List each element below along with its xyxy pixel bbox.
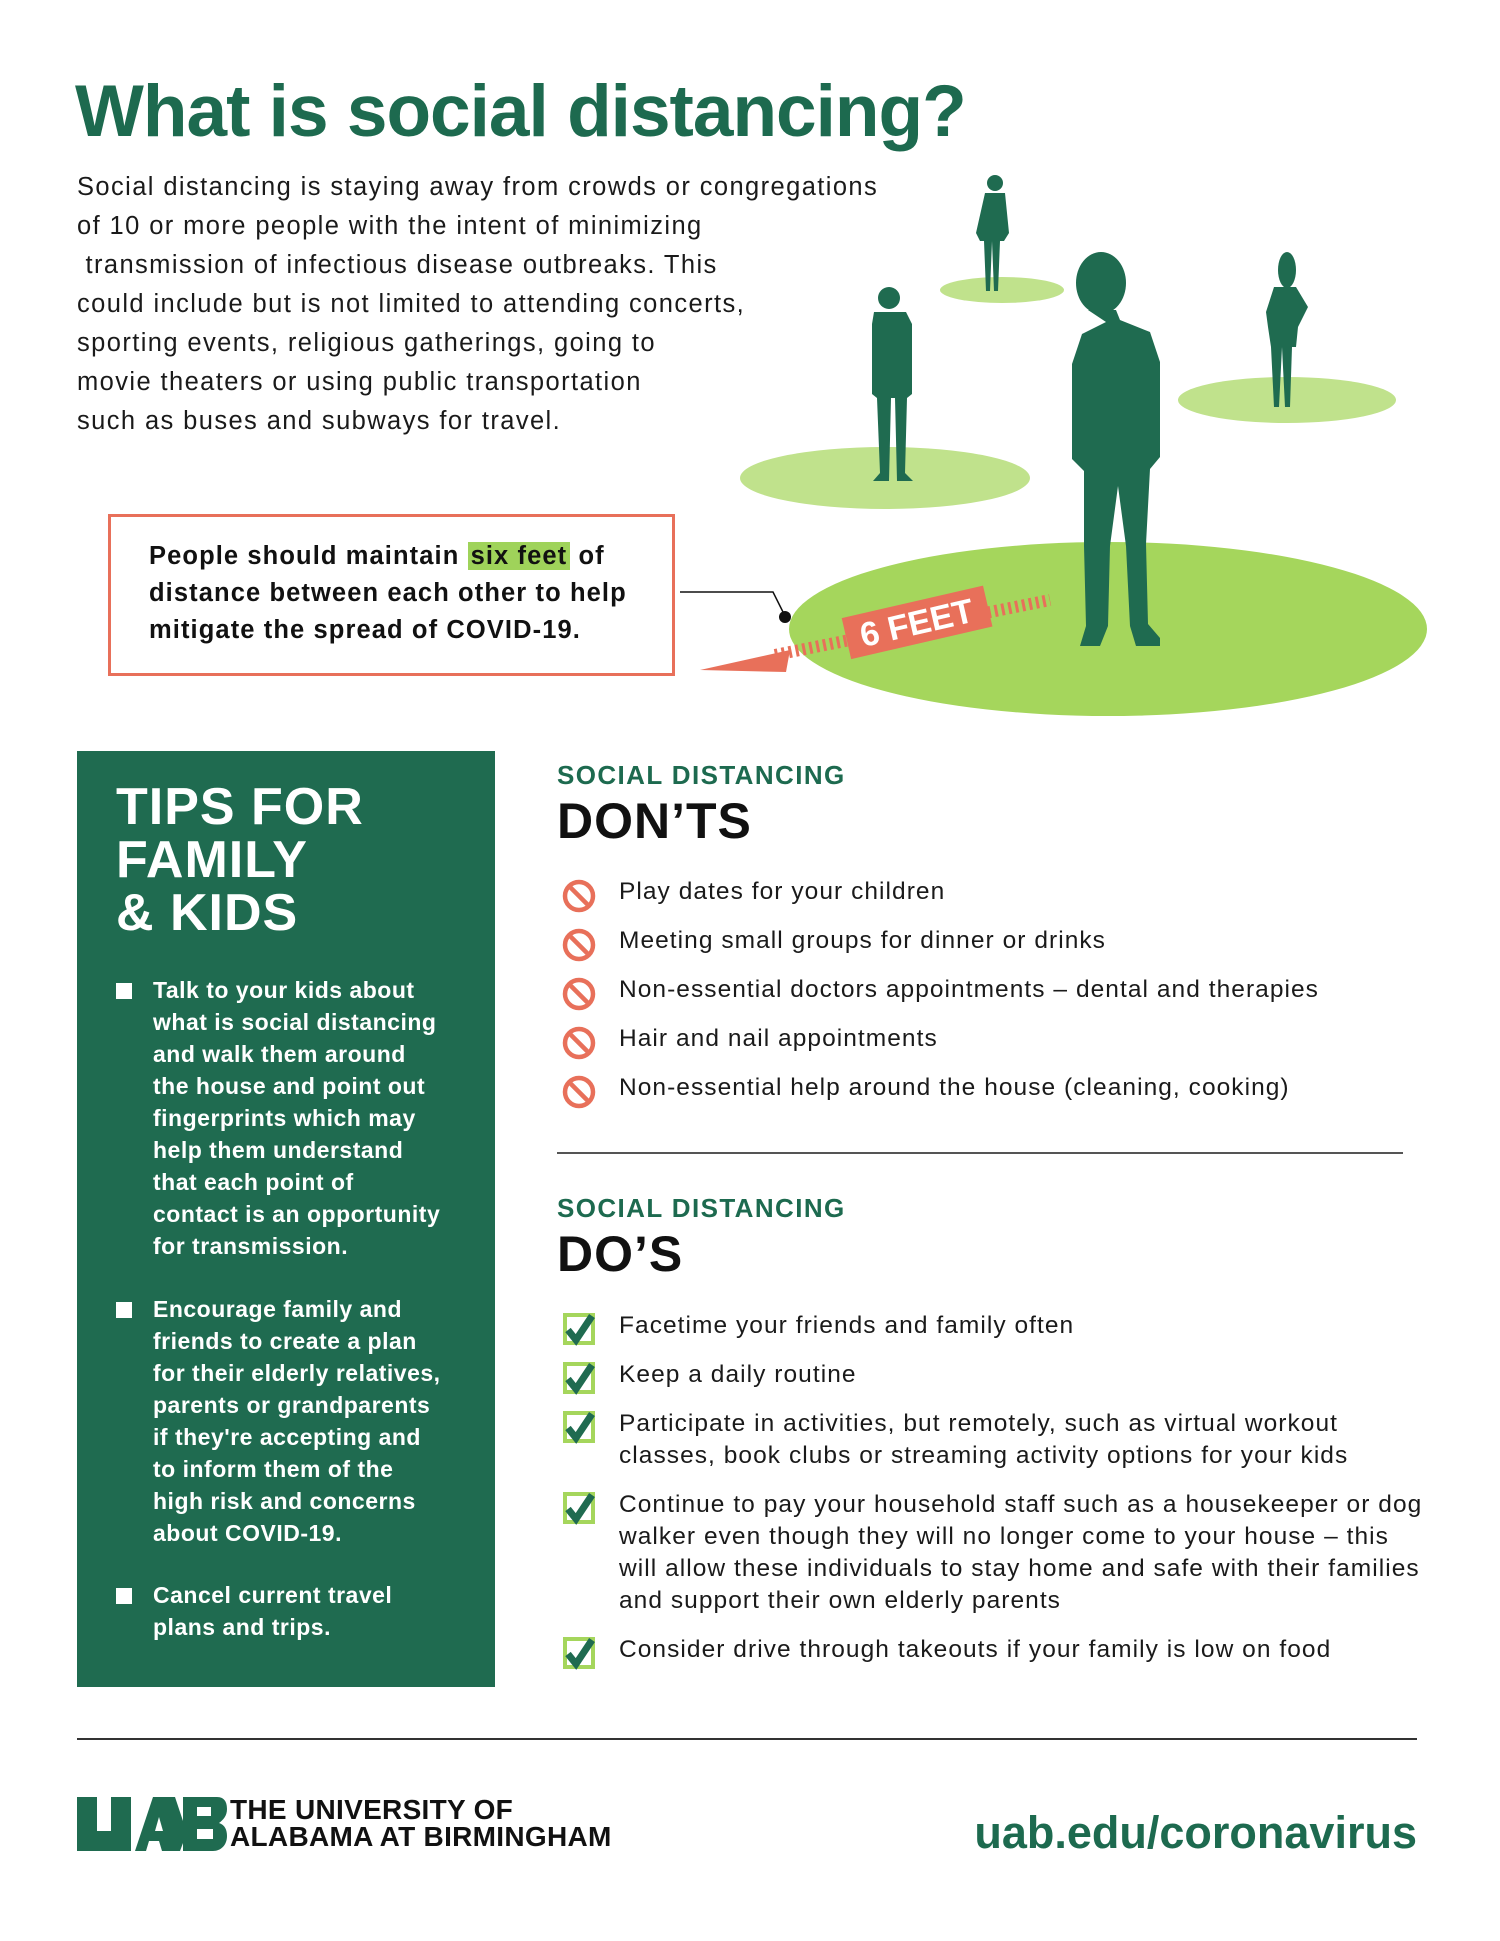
don'ts list: Meeting small groups for dinner or drinks	[619, 927, 1106, 954]
tip 2: Encourage family and	[153, 1296, 402, 1322]
do's list	[563, 1312, 1422, 1670]
intro paragraph	[77, 173, 878, 435]
tip 2: parents or grandparents	[153, 1392, 430, 1418]
tip 1: and walk them around	[153, 1041, 406, 1067]
tip 2	[116, 1293, 486, 1549]
person: right woman	[1266, 252, 1308, 407]
panel heading: FAMILY	[116, 831, 308, 889]
tip 1: fingerprints which may	[153, 1105, 416, 1131]
heading: don'ts sub: SOCIAL DISTANCING	[557, 760, 846, 790]
tip 1: help them understand	[153, 1137, 403, 1163]
tip 2: friends to create a plan	[153, 1328, 417, 1354]
tip 3: plans and trips.	[153, 1614, 331, 1640]
do's list: Facetime your friends and family often	[619, 1312, 1074, 1339]
person: small top	[976, 175, 1009, 291]
url: uab.edu/coronavirus	[974, 1807, 1417, 1858]
do's list: classes, book clubs or streaming activity options for your kids	[619, 1442, 1348, 1469]
tip 1: that each point of	[153, 1169, 354, 1195]
don'ts list: Hair and nail appointments	[619, 1025, 938, 1052]
callout: six feet: People should maintain six feet of	[149, 542, 605, 570]
don'ts list	[562, 878, 1319, 1108]
person: big center	[1072, 252, 1160, 646]
logo: UAB: ALABAMA AT BIRMINGHAM	[230, 1821, 612, 1852]
circle: left	[740, 447, 1030, 509]
intro paragraph: movie theaters or using public transportation	[77, 368, 642, 396]
panel heading	[116, 778, 364, 942]
tip 1: contact is an opportunity	[153, 1201, 440, 1227]
tip 2: if they're accepting and	[153, 1424, 421, 1450]
tip 1	[116, 974, 486, 1262]
do's list: walker even though they will no longer come to your house – this	[619, 1523, 1389, 1550]
don'ts list: Play dates for your children	[619, 878, 945, 905]
person: left man	[872, 287, 913, 481]
tip 2: to inform them of the	[153, 1456, 393, 1482]
circle: big	[789, 542, 1427, 716]
panel heading: TIPS FOR	[116, 778, 364, 836]
logo: UAB	[77, 1794, 612, 1852]
panel heading: & KIDS	[116, 884, 298, 942]
panel: tips for family & kids	[77, 751, 495, 1687]
arrow: 6 feet	[700, 586, 1050, 672]
do's list: Keep a daily routine	[619, 1361, 857, 1388]
title: What is social distancing?	[75, 71, 966, 152]
tip 1: for transmission.	[153, 1233, 348, 1259]
intro paragraph: Social distancing is staying away from crowds or congregations	[77, 173, 878, 201]
tip 3	[116, 1579, 486, 1643]
don'ts list: Non-essential doctors appointments – dental and therapies	[619, 976, 1319, 1003]
callout connector	[673, 592, 784, 614]
illustration: people on distance circles	[680, 175, 1427, 716]
circle: right	[1178, 377, 1396, 423]
intro paragraph: could include but is not limited to attending concerts,	[77, 290, 745, 318]
tip 3: Cancel current travel	[153, 1582, 392, 1608]
don'ts list: Non-essential help around the house (cleaning, cooking)	[619, 1074, 1290, 1101]
heading: do's sub: SOCIAL DISTANCING	[557, 1193, 846, 1223]
intro paragraph: such as buses and subways for travel.	[77, 407, 561, 435]
tip 2: about COVID-19.	[153, 1520, 342, 1546]
do's list: Consider drive through takeouts if your family is low on food	[619, 1636, 1331, 1663]
tip 1: what is social distancing	[153, 1009, 436, 1035]
intro paragraph: of 10 or more people with the intent of minimizing	[77, 212, 703, 240]
callout: six feet	[108, 514, 675, 676]
tip 1: the house and point out	[153, 1073, 425, 1099]
circle: top small	[940, 277, 1064, 303]
heading: don'ts: DON’TS	[557, 793, 752, 849]
do's list: Participate in activities, but remotely, such as virtual workout	[619, 1410, 1338, 1437]
do's list: Continue to pay your household staff such as a housekeeper or dog	[619, 1491, 1422, 1518]
intro paragraph: transmission of infectious disease outbreaks. This	[85, 251, 718, 279]
tip 1: Talk to your kids about	[153, 977, 415, 1003]
callout: six feet: distance between each other to help	[149, 579, 627, 607]
do's list: and support their own elderly parents	[619, 1587, 1061, 1614]
logo: UAB: THE UNIVERSITY OF	[230, 1794, 513, 1825]
callout: six feet: mitigate the spread of COVID-19.	[149, 616, 581, 644]
tip 2: for their elderly relatives,	[153, 1360, 441, 1386]
tip 2: high risk and concerns	[153, 1488, 416, 1514]
do's list: will allow these individuals to stay home and safe with their families	[619, 1555, 1420, 1582]
arrow: 6 feet: 6 FEET	[856, 592, 977, 655]
heading: do's: DO’S	[557, 1226, 683, 1282]
intro paragraph: sporting events, religious gatherings, going to	[77, 329, 656, 357]
